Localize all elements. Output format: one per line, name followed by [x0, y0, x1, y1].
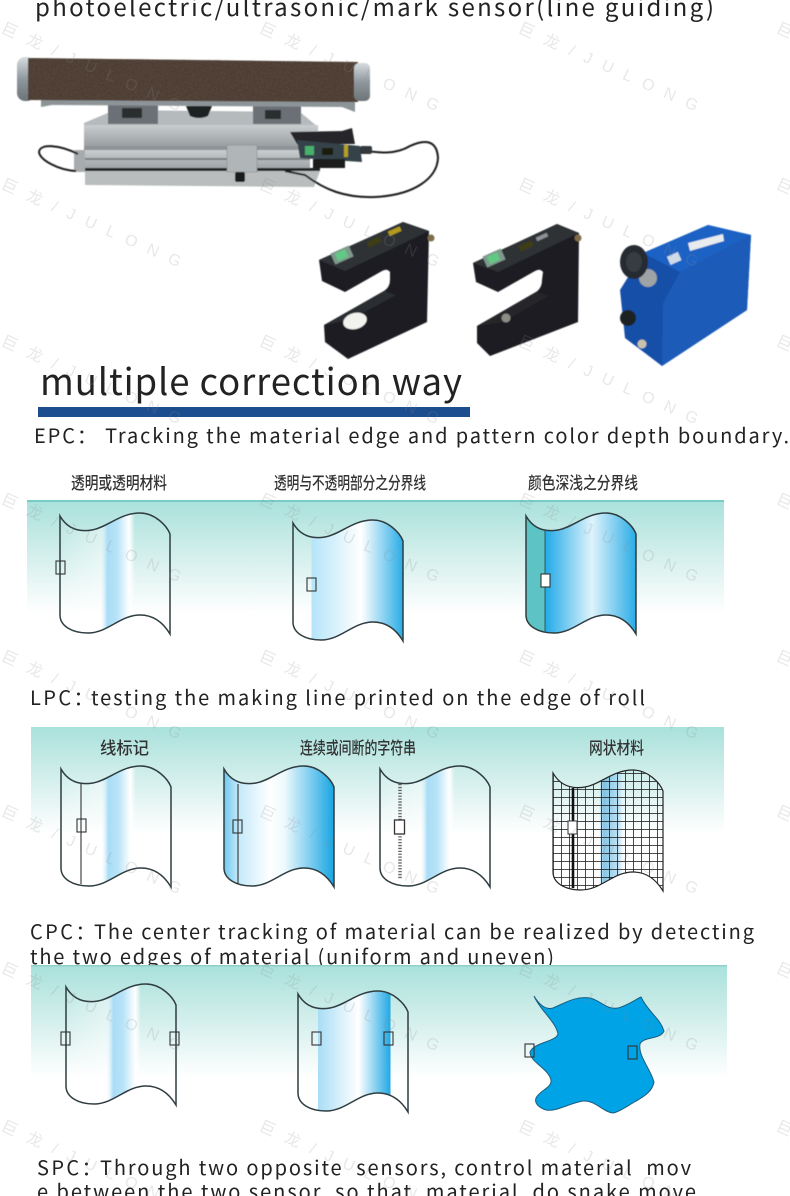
cable	[39, 142, 438, 197]
text: LPC description: LPC：	[30, 682, 96, 711]
text: EPC description: EPC： Tracking the material edge and pattern color depth boundary.	[34, 420, 789, 449]
photo: web guide machine with roller	[17, 57, 438, 197]
sheet: half opaque	[293, 520, 403, 641]
panel: CPC diagrams	[31, 965, 727, 1113]
text: SPC description	[38, 1158, 696, 1196]
watermark: 巨龙/JULONG	[515, 647, 701, 743]
watermark: 巨龙/JULONG	[515, 175, 701, 271]
watermark: 巨龙/JULONG	[515, 19, 701, 115]
watermark: 巨龙/JULONG	[256, 175, 442, 271]
text: LPC description: testing the making line printed on the edge of roll	[91, 682, 645, 711]
watermark: 巨龙/JULONG	[0, 802, 184, 898]
label: mesh material: 网状材料	[589, 734, 644, 759]
photo: ultrasonic fork sensor	[319, 222, 434, 359]
sheet: blue with line	[224, 766, 334, 887]
blob: uneven material	[525, 996, 664, 1113]
sheet: line mark	[61, 766, 171, 887]
panel background	[27, 500, 724, 613]
panel background	[31, 965, 727, 1078]
label: transparent material: 透明或透明材料	[71, 469, 167, 494]
heading: multiple correction way: multiple correction way	[40, 353, 462, 406]
watermark: 巨龙/JULONG	[256, 332, 442, 428]
text: CPC description: the two edges of material (uniform and uneven)	[30, 941, 554, 970]
label: continuous or intermittent string: 连续或间断的字符串	[300, 734, 416, 759]
photo: blue colour mark sensor	[620, 225, 751, 366]
cork roller	[17, 57, 370, 102]
base plate	[74, 110, 320, 187]
sheet: transparent material	[56, 513, 170, 634]
watermark: 巨龙/JULONG	[0, 332, 184, 428]
roller mounts	[108, 104, 301, 124]
panel background	[31, 727, 724, 834]
sheet: transparent with two sensors	[61, 984, 179, 1105]
watermark: 巨龙/JULONG	[515, 802, 701, 898]
panel: LPC diagrams	[31, 727, 724, 891]
watermark: 巨龙/JULONG	[515, 332, 701, 428]
label: transparent boundary: 透明与不透明部分之分界线	[274, 469, 426, 494]
text: CPC description: The center tracking of material can be realized by detecting	[94, 916, 754, 945]
watermark: 巨龙/JULONG	[256, 647, 442, 743]
connector cap	[620, 245, 657, 287]
watermark: 巨龙/JULONG	[0, 959, 184, 1055]
label: line mark: 线标记	[100, 734, 149, 759]
watermark: 巨龙/JULONG	[256, 802, 442, 898]
watermark: 巨龙/JULONG	[515, 490, 701, 586]
watermark: 巨龙/JULONG	[0, 647, 184, 743]
photo: photoelectric fork sensor	[473, 224, 582, 356]
panel: EPC diagrams	[27, 469, 724, 641]
watermark: 巨龙/JULONG	[0, 490, 184, 586]
watermark: 巨龙/JULONG	[256, 490, 442, 586]
adjustment knob	[620, 310, 636, 326]
roller support plate	[41, 98, 355, 112]
watermark: 巨龙/JULONG	[0, 175, 184, 271]
text: SPC description: SPC：	[37, 1152, 104, 1181]
heading underline bar	[38, 407, 470, 417]
label: colour depth boundary: 颜色深浅之分界线	[528, 469, 638, 494]
watermark: 巨龙/JULONG	[256, 959, 442, 1055]
watermark: 巨龙/JULONG	[256, 19, 442, 115]
sheet: colour boundary	[526, 513, 636, 634]
watermark: 巨龙/JULONG	[0, 19, 184, 115]
mounted sensor	[290, 128, 372, 168]
text: SPC description: Through two opposite sensors, control material mov	[100, 1152, 692, 1181]
sheet: mesh material	[553, 770, 663, 891]
text: CPC description: CPC：	[30, 916, 98, 945]
text: CPC description	[30, 916, 754, 970]
sheet: character string	[380, 766, 490, 887]
watermark: 巨龙/JULONG	[515, 959, 701, 1055]
sheet: centre blue band	[298, 991, 408, 1112]
